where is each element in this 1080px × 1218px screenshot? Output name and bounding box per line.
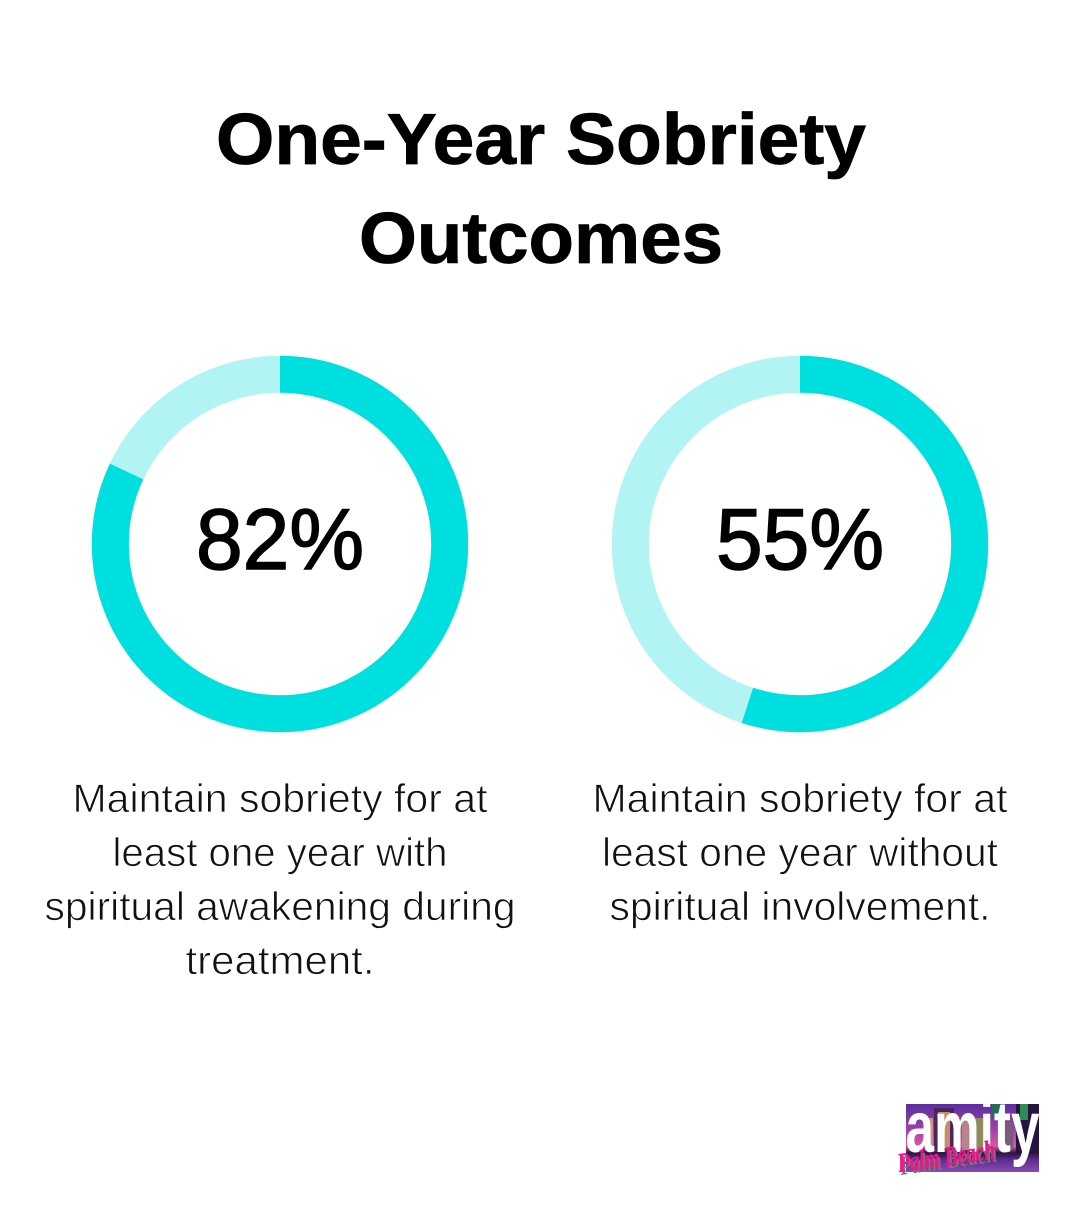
description: 55%: Maintain sobriety for at <box>592 777 1008 821</box>
description: 55%: least one year without <box>602 831 998 875</box>
logo: Amity Palm Beach: Palm Beach <box>895 1135 997 1178</box>
donut chart: 55%: 55% <box>716 492 884 588</box>
donut chart: 82% <box>110 374 450 714</box>
donut chart: 55% <box>630 374 970 714</box>
description: 82%: treatment. <box>186 939 374 983</box>
description: 82%: spiritual awakening during <box>44 885 516 929</box>
description: 82%: Maintain sobriety for at <box>72 777 488 821</box>
title: One-Year Sobriety <box>216 100 866 180</box>
logo: Amity Palm Beach <box>895 1088 1040 1181</box>
panel: 82% with spiritual awakening <box>44 374 516 983</box>
panel: 55% without spiritual involvement <box>592 374 1008 929</box>
description: 55% <box>592 777 1008 929</box>
description: 82%: least one year with <box>112 831 448 875</box>
donut chart: 82%: 82% <box>196 492 364 588</box>
title: Outcomes <box>359 199 723 279</box>
description: 55%: spiritual involvement. <box>610 885 990 929</box>
title <box>216 100 866 279</box>
description: 82% <box>44 777 516 983</box>
logo: Amity Palm Beach: Palm Beach <box>897 1138 999 1181</box>
